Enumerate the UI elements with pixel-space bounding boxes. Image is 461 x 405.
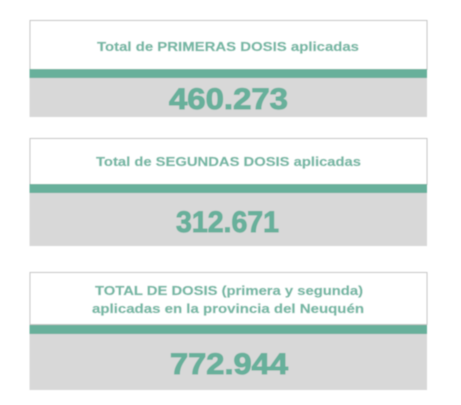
gray value area (30, 78, 427, 117)
heading line 2: aplicadas en la provincia del Neuquén (92, 301, 364, 316)
panel: total de dosis (30, 272, 427, 390)
panel background (30, 138, 427, 184)
panel background (30, 272, 427, 324)
panel background (30, 20, 427, 70)
heading: Total de SEGUNDAS DOSIS aplicadas (96, 154, 361, 169)
heading line 1: TOTAL DE DOSIS (primera y segunda) (95, 283, 363, 298)
gray value area (30, 193, 427, 246)
value: 772.944 (170, 348, 288, 381)
value: 312.671 (176, 206, 279, 239)
green bar (30, 69, 427, 78)
heading: Total de PRIMERAS DOSIS aplicadas (97, 39, 359, 54)
panel: segundas dosis (30, 138, 427, 246)
gray value area (30, 334, 427, 390)
green bar (30, 184, 427, 193)
green bar (30, 325, 427, 334)
panel: primeras dosis (30, 20, 427, 117)
value: 460.273 (169, 83, 288, 116)
